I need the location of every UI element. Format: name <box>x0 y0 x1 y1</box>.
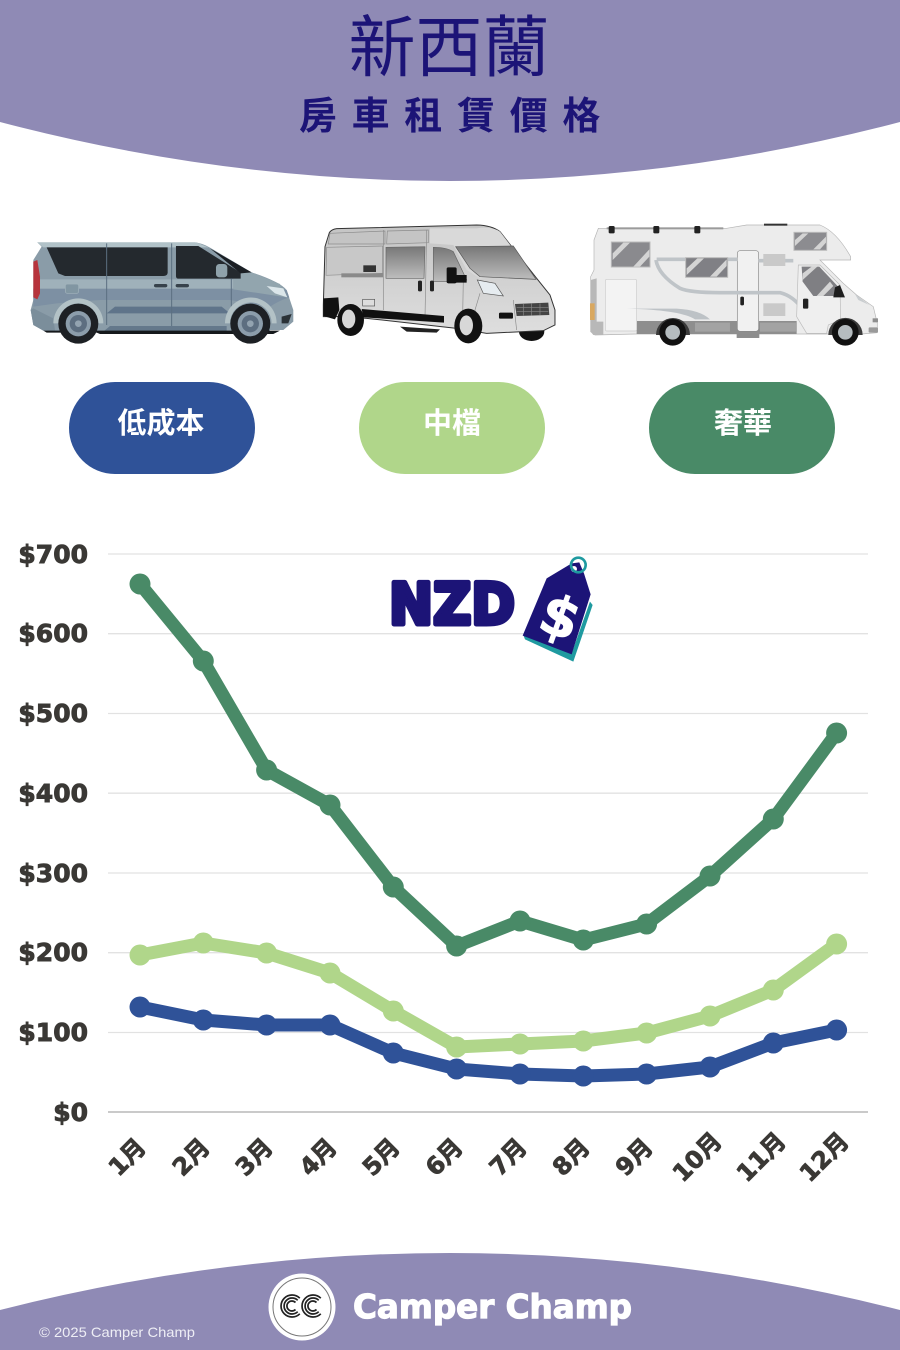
icon: mid-range van <box>323 225 555 343</box>
x axis labels: 8月 <box>547 1133 596 1182</box>
y axis labels: $300 <box>18 859 88 888</box>
x axis labels: 7月 <box>484 1133 533 1182</box>
x axis labels <box>103 1127 855 1188</box>
x axis labels: 2月 <box>167 1133 216 1182</box>
icon: low-cost minivan <box>31 242 293 344</box>
button: mid-range: 中檔 <box>423 407 481 440</box>
currency label: NZD: NZD <box>389 572 515 638</box>
icon: price tag <box>523 558 593 662</box>
y axis labels: $500 <box>18 699 88 728</box>
header banner <box>0 0 900 181</box>
footer banner <box>0 1253 900 1350</box>
y axis labels: $600 <box>18 619 88 648</box>
copyright: © 2025 Camper Champ <box>39 1324 195 1340</box>
icon: luxury motorhome <box>590 224 878 346</box>
y axis labels <box>18 540 88 1127</box>
button: low cost: 低成本 <box>117 407 205 440</box>
line: low cost <box>130 996 847 1086</box>
brand name: Camper Champ <box>353 1287 632 1326</box>
x axis labels: 10月 <box>667 1127 728 1188</box>
x axis labels: 5月 <box>357 1133 406 1182</box>
x axis labels: 6月 <box>420 1133 469 1182</box>
y axis labels: $0 <box>53 1098 88 1127</box>
y axis labels: $700 <box>18 540 88 569</box>
y axis labels: $100 <box>18 1018 88 1047</box>
logo <box>268 1274 336 1340</box>
line chart <box>18 540 868 1188</box>
x axis labels: 4月 <box>294 1133 343 1182</box>
x axis labels: 9月 <box>610 1133 659 1182</box>
button: low cost <box>69 382 255 474</box>
x axis labels: 3月 <box>230 1133 279 1182</box>
button: luxury: 奢華 <box>714 407 772 440</box>
button: mid-range <box>359 382 545 474</box>
icon: price tag: $ <box>531 580 589 654</box>
x axis labels: 1月 <box>103 1133 152 1182</box>
button: luxury <box>649 382 835 474</box>
line: luxury <box>130 574 847 956</box>
x axis labels: 12月 <box>794 1127 855 1188</box>
y axis labels: $400 <box>18 779 88 808</box>
line: mid-range <box>130 932 847 1058</box>
x axis labels: 11月 <box>731 1127 792 1188</box>
subtitle: 房車租賃價格 <box>299 85 615 140</box>
y axis labels: $200 <box>18 938 88 967</box>
